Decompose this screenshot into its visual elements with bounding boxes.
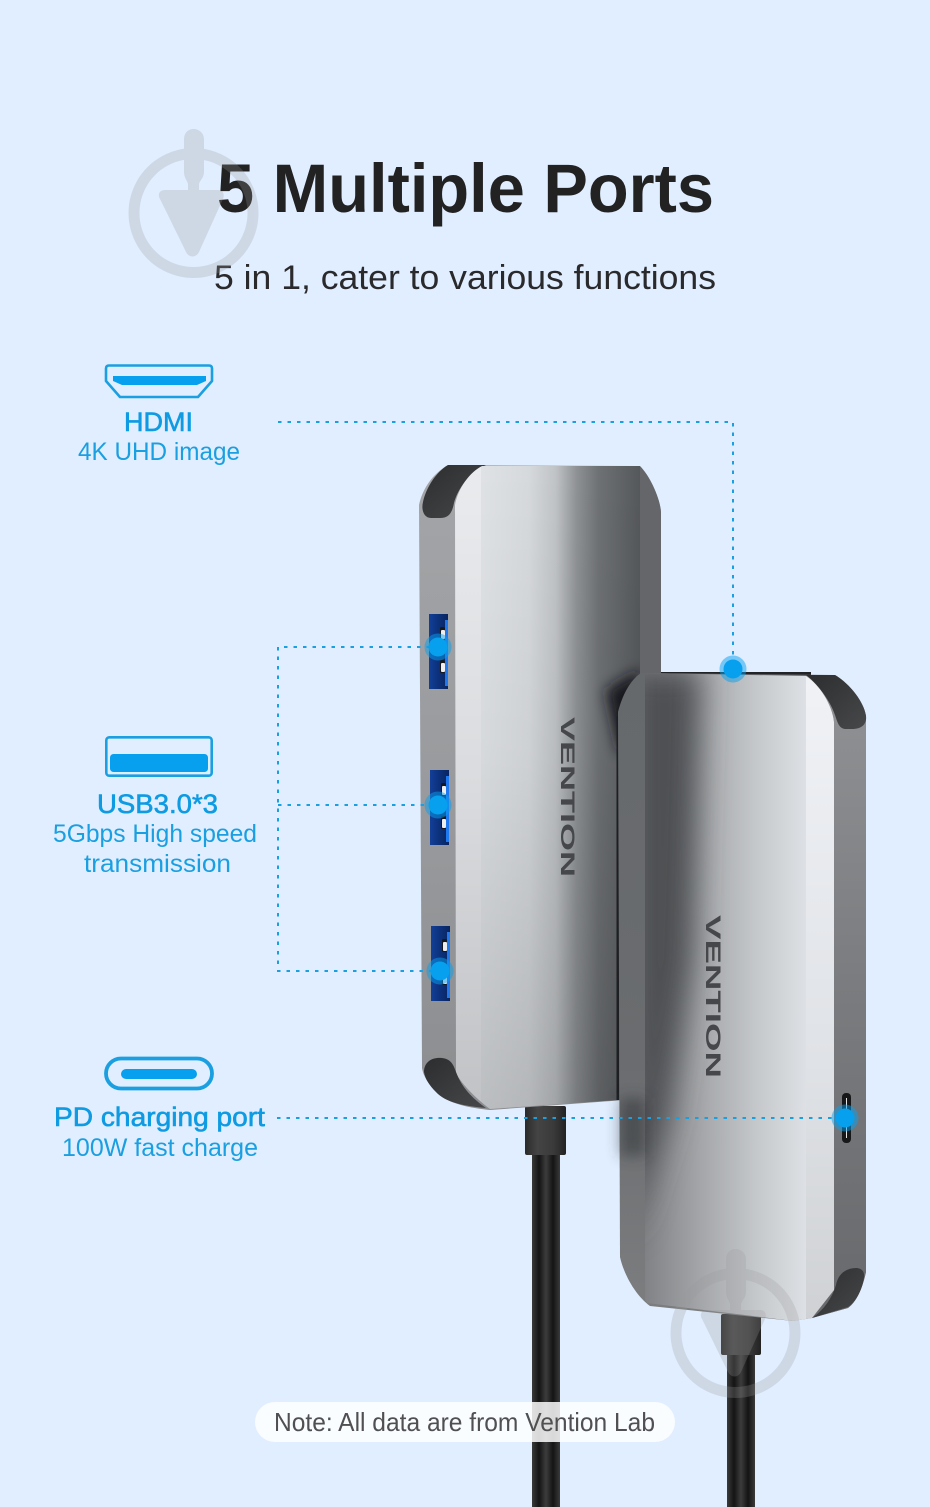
label: HDMI xyxy=(78,407,240,466)
hub main face xyxy=(455,466,641,1111)
hotspot: USB port 3 xyxy=(426,958,454,984)
product: front hub with PD port xyxy=(616,670,866,1325)
watermark: bottom right xyxy=(671,1249,801,1398)
front hub bottom notch xyxy=(812,1268,864,1318)
leader lines: USB xyxy=(278,647,432,971)
label: PD charging port: PD charging port xyxy=(54,1102,266,1132)
hub right edge xyxy=(640,466,661,720)
hub top notch xyxy=(422,465,486,518)
icon: USB-C xyxy=(106,1058,212,1088)
leader line: PD port xyxy=(277,1117,845,1119)
label: USB3.0: transmission xyxy=(84,850,231,878)
USB port 2 xyxy=(430,770,449,845)
watermark: top left xyxy=(129,129,259,278)
hotspot: PD port xyxy=(832,1104,858,1132)
USB port 3 xyxy=(431,926,450,1001)
USB port 1 xyxy=(429,614,448,689)
front hub body xyxy=(618,673,866,1321)
product: rear hub with three USB ports xyxy=(419,465,661,1111)
front hub right side xyxy=(806,675,866,1318)
cable: left hub xyxy=(525,1106,566,1508)
hotspot: USB port 1 xyxy=(424,634,452,660)
front hub main face xyxy=(630,670,834,1325)
hub logo: VENTION xyxy=(556,717,577,877)
USB-C port xyxy=(842,1093,851,1143)
hotspot: HDMI port xyxy=(720,656,746,682)
leader line: HDMI xyxy=(278,422,733,669)
icon: USB xyxy=(106,737,212,776)
hotspot: USB port 2 xyxy=(424,792,452,818)
front hub top notch xyxy=(806,675,866,729)
label: HDMI: 4K UHD image xyxy=(78,438,240,466)
front hub logo: VENTION xyxy=(701,915,724,1078)
shadow cast by rear hub xyxy=(620,1098,646,1156)
icon: HDMI xyxy=(106,366,212,397)
title: 5 Multiple Ports xyxy=(217,150,714,227)
label: USB3.0: USB3.0*3 xyxy=(97,789,218,819)
label: PD charging port: 100W fast charge xyxy=(62,1134,258,1162)
label: PD charging port xyxy=(54,1102,266,1162)
note pill: Note: All data are from Vention Lab xyxy=(274,1407,655,1437)
hub side panel xyxy=(419,465,661,1110)
front hub top edge xyxy=(661,672,811,675)
label: USB3.0: 5Gbps High speed xyxy=(53,820,257,848)
subtitle: 5 in 1, cater to various functions xyxy=(214,259,716,297)
hub bottom notch xyxy=(424,1058,486,1108)
cable: right hub xyxy=(721,1314,761,1508)
label: HDMI: HDMI xyxy=(124,407,193,437)
label: USB3.0 xyxy=(53,789,257,878)
front hub shadow line xyxy=(616,708,619,1100)
